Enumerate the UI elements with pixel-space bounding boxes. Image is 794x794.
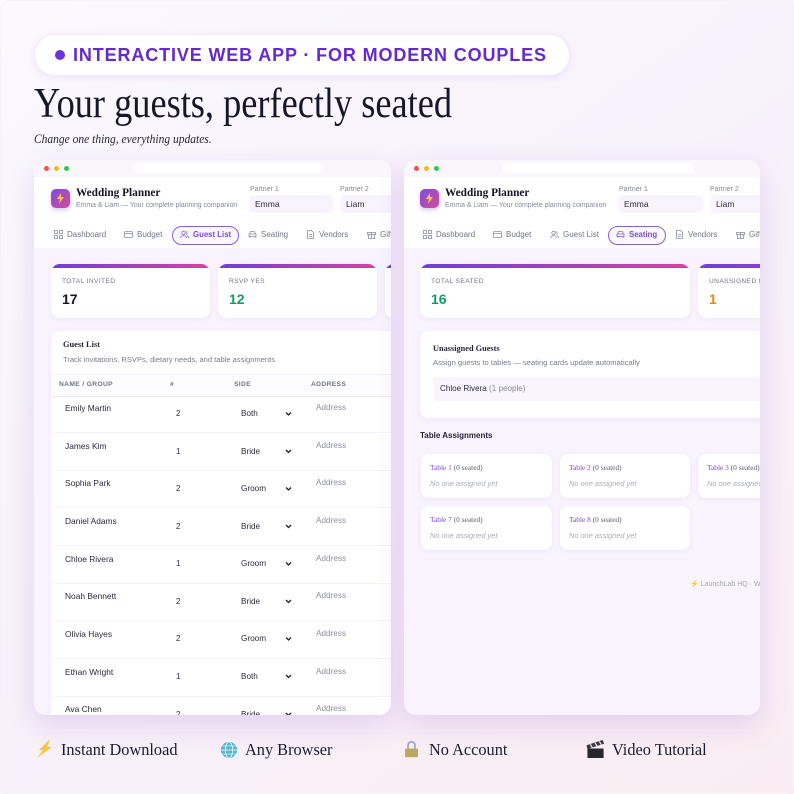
navigation tabs: Dashboard xyxy=(436,230,475,239)
badge text: INTERACTIVE WEB APP · FOR MODERN COUPLES xyxy=(73,45,547,65)
table rows: Address xyxy=(316,554,346,563)
panel: seating window xyxy=(404,160,760,715)
navigation tabs: Seating xyxy=(629,230,657,239)
app name: Wedding Planner xyxy=(445,187,529,199)
app logo xyxy=(51,189,70,208)
badge dot xyxy=(55,50,65,60)
table rows: Bride xyxy=(241,447,260,456)
navigation tabs: Guest List xyxy=(193,230,231,239)
table description: Track invitations, RSVPs, dietary needs, and table assignments xyxy=(63,355,275,364)
app header xyxy=(404,177,760,222)
app header: Liam xyxy=(716,199,734,209)
app header: Partner 2 xyxy=(710,186,739,193)
feature: instant download xyxy=(37,740,178,759)
table cards: No one assigned yet xyxy=(430,479,497,488)
stat card: rsvp yes xyxy=(218,264,377,318)
navigation tabs: Guest List xyxy=(563,230,599,239)
table rows: Address xyxy=(316,591,346,600)
table rows: 2 xyxy=(176,522,180,531)
table cards: No one assigned yet xyxy=(569,531,636,540)
table rows: 2 xyxy=(176,484,180,493)
window title bar xyxy=(34,160,391,178)
table cards: Table 3 (0 seated) xyxy=(707,463,760,472)
table rows: Groom xyxy=(241,484,266,493)
table rows: Sophia Park xyxy=(65,478,111,488)
table header row: ADDRESS xyxy=(311,381,346,388)
unassigned guest row: Chloe Rivera (1 people) xyxy=(440,384,526,393)
table rows: Both xyxy=(241,409,258,418)
app name: Wedding Planner xyxy=(76,187,160,199)
stat card: total invited: 17 xyxy=(62,291,78,307)
table cards: No one assigned yet xyxy=(569,479,636,488)
stat card: rsvp yes: 12 xyxy=(229,291,245,307)
table cards: Table 8 (0 seated) xyxy=(569,515,622,524)
table rows: Olivia Hayes xyxy=(65,629,112,639)
table header row: NAME / GROUP xyxy=(59,381,113,388)
table rows: Groom xyxy=(241,634,266,643)
table cards xyxy=(421,454,760,551)
table rows: Address xyxy=(316,629,346,638)
stat card: total seated: TOTAL SEATED xyxy=(431,278,484,285)
table cards: Table 1 (0 seated) xyxy=(430,463,483,472)
stat card: total seated xyxy=(420,264,690,318)
table rows: Address xyxy=(316,478,346,487)
table rows: Groom xyxy=(241,559,266,568)
icon: globe xyxy=(220,741,238,759)
icon: lightning bolt xyxy=(37,740,52,758)
icon: padlock xyxy=(405,740,418,758)
navigation tabs: Vendors xyxy=(688,230,717,239)
navigation tabs: Budget xyxy=(506,230,531,239)
table header row: SIDE xyxy=(234,381,251,388)
title: Your guests, perfectly seated xyxy=(34,81,452,127)
table rows: Emily Martin xyxy=(65,403,111,413)
panel: unassigned guests xyxy=(420,331,780,418)
partner 1 field: Partner 1 xyxy=(250,186,279,193)
navigation tabs xyxy=(34,221,391,248)
table rows: Address xyxy=(316,704,346,713)
table rows: 1 xyxy=(176,559,180,568)
stat card: clipped xyxy=(385,264,544,318)
table rows: James Kim xyxy=(65,441,106,451)
navigation tabs xyxy=(404,221,760,248)
window title bar xyxy=(404,160,760,178)
table rows: Noah Bennett xyxy=(65,591,116,601)
stat card: unassigned: 1 xyxy=(709,291,717,307)
table rows: 2 xyxy=(176,409,180,418)
table cards: No one assigned yet xyxy=(430,531,497,540)
navigation tabs: Seating xyxy=(261,230,288,239)
table header row xyxy=(51,374,411,397)
label: Instant Download xyxy=(61,740,177,759)
app logo xyxy=(420,189,439,208)
table rows: Daniel Adams xyxy=(65,516,117,526)
app header xyxy=(34,177,391,222)
stat card: total invited: TOTAL INVITED xyxy=(62,278,115,285)
table rows xyxy=(51,403,391,715)
feature: no account xyxy=(405,740,508,759)
app tagline: Emma & Liam — Your complete planning companion xyxy=(445,202,606,209)
table cards: Table 7 (0 seated) xyxy=(430,515,483,524)
app header: Emma xyxy=(624,199,649,209)
feature: video tutorial xyxy=(586,740,707,759)
section heading: Unassigned Guests xyxy=(433,344,500,353)
divider xyxy=(34,730,760,731)
table rows: 2 xyxy=(176,634,180,643)
label: Any Browser xyxy=(245,740,332,759)
badge pill xyxy=(34,34,570,76)
navigation tabs: Dashboard xyxy=(67,230,106,239)
label: Video Tutorial xyxy=(612,740,707,759)
table rows: Both xyxy=(241,672,258,681)
table rows: Bride xyxy=(241,522,260,531)
table rows: Ava Chen xyxy=(65,704,102,714)
app header: Liam xyxy=(346,199,364,209)
app tagline: Emma & Liam — Your complete planning companion xyxy=(76,202,237,209)
app header: Partner 2 xyxy=(340,186,369,193)
stat card: total invited xyxy=(51,264,210,318)
table rows: Ethan Wright xyxy=(65,667,113,677)
table rows: Chloe Rivera xyxy=(65,554,113,564)
table rows: 1 xyxy=(176,672,180,681)
stat card: total seated: 16 xyxy=(431,291,447,307)
table header row: # xyxy=(170,381,174,388)
table rows: Address xyxy=(316,667,346,676)
table rows: Bride xyxy=(241,597,260,606)
table heading: Guest List xyxy=(63,340,100,349)
subtitle: Change one thing, everything updates. xyxy=(34,131,212,146)
stat card: rsvp yes: RSVP YES xyxy=(229,278,265,285)
stat card: unassigned xyxy=(698,264,794,318)
icon: clapperboard xyxy=(586,740,604,758)
table rows: 2 xyxy=(176,597,180,606)
navigation tabs: Vendors xyxy=(319,230,348,239)
label: No Account xyxy=(429,740,507,759)
partner 1 field: Partner 1 xyxy=(619,186,648,193)
unassigned guest row xyxy=(433,377,780,401)
panel: guest list window xyxy=(34,160,391,715)
panel: guest list table xyxy=(51,331,411,731)
table rows: Address xyxy=(316,441,346,450)
table rows: Address xyxy=(316,516,346,525)
heading: table assignments: Table Assignments xyxy=(420,431,492,440)
feature: any browser xyxy=(220,740,332,759)
app header: Emma xyxy=(255,199,280,209)
table cards: Table 2 (0 seated) xyxy=(569,463,622,472)
table rows: 1 xyxy=(176,447,180,456)
table rows: Address xyxy=(316,403,346,412)
navigation tabs: Budget xyxy=(137,230,162,239)
section description: Assign guests to tables — seating cards update automatically xyxy=(433,358,640,367)
